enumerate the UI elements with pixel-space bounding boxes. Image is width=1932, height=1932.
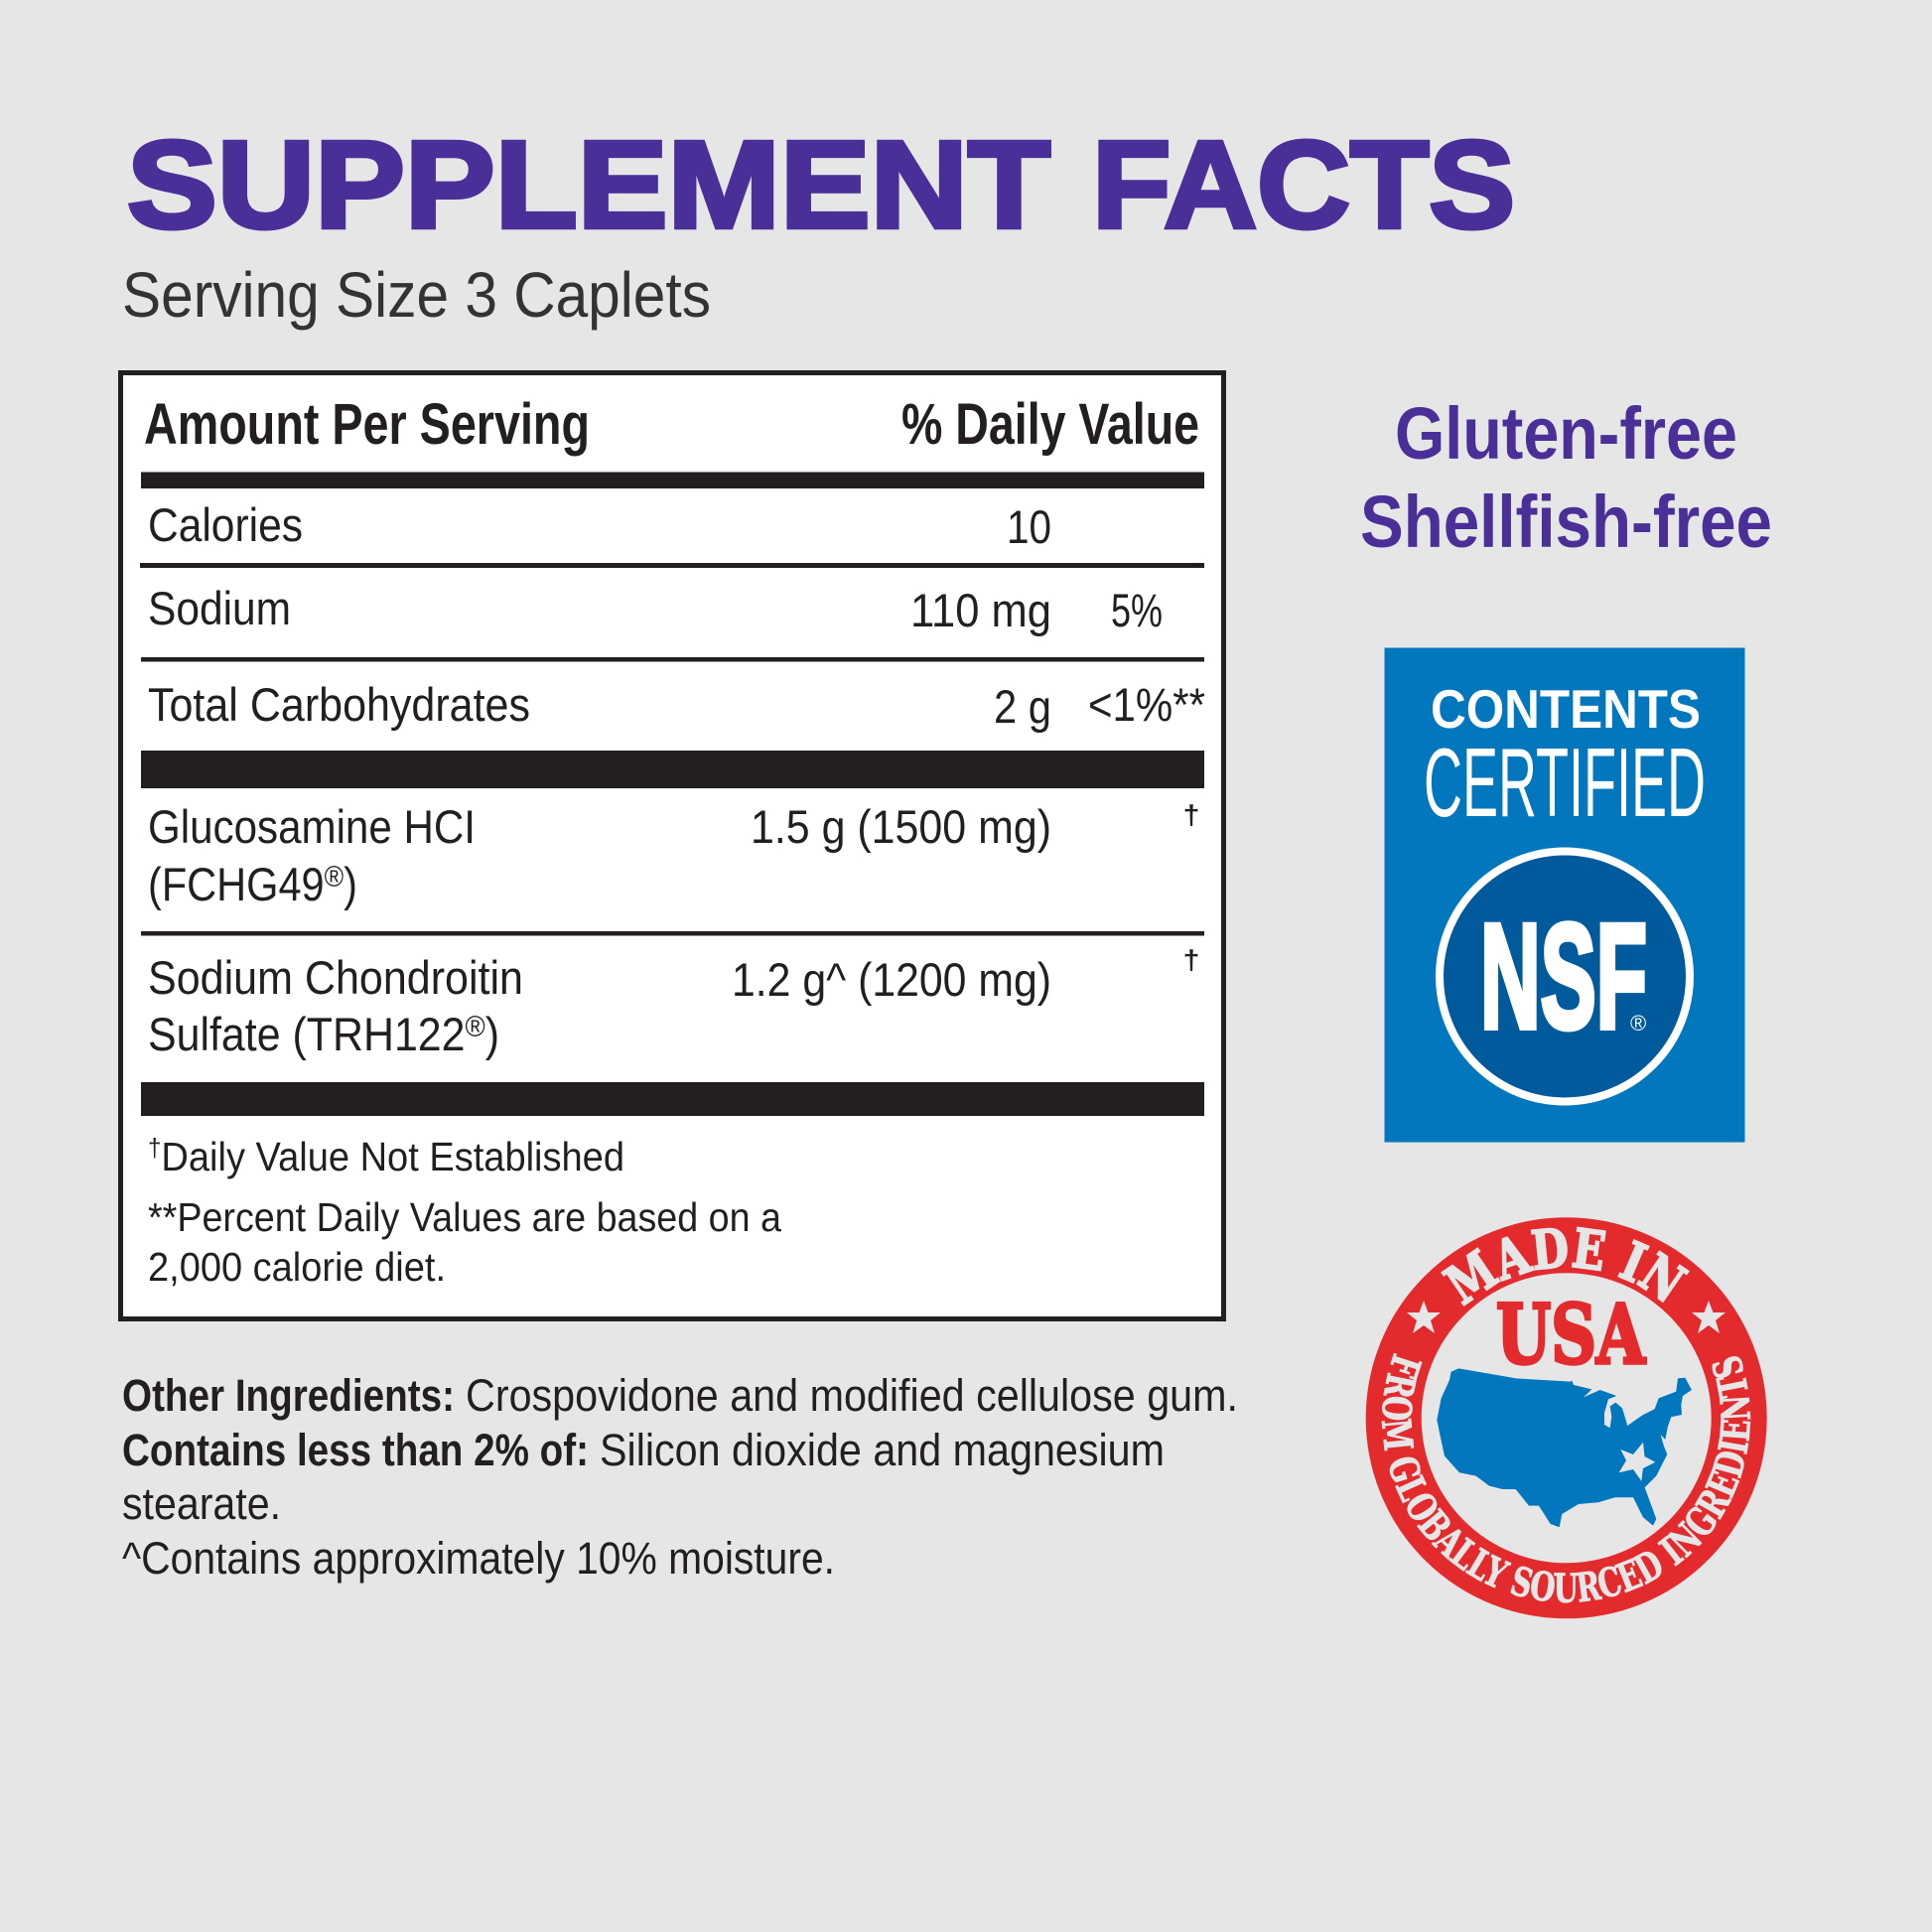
row: chondroitin: ) bbox=[485, 1008, 499, 1060]
title: FACTS bbox=[1092, 116, 1515, 254]
row: glucosamine: (FCHG49 bbox=[148, 858, 347, 910]
table footnotes: **Percent Daily Values are based on a bbox=[148, 1194, 781, 1240]
table header row bbox=[144, 392, 1199, 457]
free-from claims: Gluten-free bbox=[1395, 392, 1737, 475]
row: total carbohydrates: <1%** bbox=[1088, 678, 1205, 731]
row: glucosamine: ) bbox=[344, 858, 357, 910]
row: total carbohydrates: 2 g bbox=[994, 680, 1051, 733]
row: chondroitin bbox=[148, 945, 1199, 1060]
row: sodium bbox=[148, 582, 1163, 636]
red ring bbox=[1394, 1245, 1739, 1590]
row: total carbohydrates: Total Carbohydrates bbox=[148, 678, 530, 731]
other ingredients text block: Silicon dioxide and magnesium bbox=[600, 1425, 1165, 1475]
divider bbox=[141, 657, 1204, 661]
table footnotes: Daily Value Not Established bbox=[161, 1134, 624, 1179]
title: SUPPLEMENT bbox=[127, 116, 1050, 254]
row: glucosamine: † bbox=[1183, 800, 1199, 830]
row: chondroitin: Sodium Chondroitin bbox=[148, 951, 523, 1004]
certified label: CERTIFIED bbox=[1424, 728, 1706, 837]
free-from claims: Shellfish-free bbox=[1360, 481, 1772, 563]
row: calories bbox=[148, 498, 1051, 553]
thick divider bar bbox=[141, 751, 1204, 788]
badge background bbox=[1384, 647, 1745, 1142]
row: total carbohydrates bbox=[148, 678, 1205, 733]
row: chondroitin: Sulfate (TRH122 bbox=[148, 1008, 495, 1060]
US map bbox=[1437, 1368, 1692, 1527]
table header row: % Daily Value bbox=[901, 392, 1199, 457]
table footnotes bbox=[148, 1133, 781, 1290]
USA text: USA bbox=[1496, 1288, 1646, 1383]
row: chondroitin: ® bbox=[466, 1011, 485, 1043]
row: chondroitin: 1.2 g^ (1200 mg) bbox=[732, 953, 1051, 1006]
badge: made in USA bbox=[1366, 1217, 1767, 1618]
row: calories: Calories bbox=[148, 498, 303, 551]
title bbox=[127, 116, 1515, 254]
other ingredients text block: ^Contains approximately 10% moisture. bbox=[122, 1533, 835, 1584]
row: sodium: Sodium bbox=[148, 582, 291, 634]
row: glucosamine bbox=[148, 800, 1199, 910]
row: calories: 10 bbox=[1007, 500, 1051, 553]
contents label: CONTENTS bbox=[1431, 678, 1701, 740]
row: sodium: 110 mg bbox=[910, 584, 1051, 636]
other ingredients text block: Contains less than 2% of: bbox=[122, 1425, 589, 1475]
table frame bbox=[121, 373, 1223, 1318]
NSF seal bbox=[1440, 852, 1690, 1102]
other ingredients text block bbox=[122, 1370, 1238, 1584]
divider bbox=[141, 931, 1204, 935]
NSF seal: ® bbox=[1630, 1011, 1646, 1035]
row: glucosamine: 1.5 g (1500 mg) bbox=[751, 800, 1051, 853]
thick divider bar bbox=[141, 1082, 1204, 1116]
made in arc text: MADE IN bbox=[1441, 1227, 1690, 1307]
row: glucosamine: Glucosamine HCI bbox=[148, 800, 476, 853]
NSF seal: NSF bbox=[1480, 893, 1647, 1059]
globally sourced arc text: FROM GLOBALLY SOURCED INGREDIENTS bbox=[1382, 1352, 1751, 1603]
row: chondroitin: † bbox=[1183, 945, 1199, 975]
header divider bar bbox=[141, 473, 1204, 488]
free-from claims bbox=[1360, 392, 1772, 563]
other ingredients text block: Crospovidone and modified cellulose gum. bbox=[466, 1370, 1238, 1421]
divider bbox=[140, 563, 1204, 568]
right star bbox=[1692, 1301, 1725, 1333]
left star bbox=[1407, 1301, 1441, 1333]
row: sodium: 5% bbox=[1111, 584, 1163, 636]
panel: supplement facts table bbox=[121, 373, 1223, 1318]
serving size subtitle: Serving Size 3 Caplets bbox=[122, 259, 711, 331]
table footnotes: † bbox=[148, 1133, 161, 1163]
map star bbox=[1619, 1443, 1655, 1481]
table footnotes: 2,000 calorie diet. bbox=[148, 1244, 446, 1290]
table header row: Amount Per Serving bbox=[144, 392, 590, 457]
other ingredients text block: stearate. bbox=[122, 1478, 281, 1529]
other ingredients text block: Other Ingredients: bbox=[122, 1370, 455, 1421]
badge: NSF contents certified bbox=[1384, 647, 1745, 1142]
row: glucosamine: ® bbox=[325, 861, 344, 894]
